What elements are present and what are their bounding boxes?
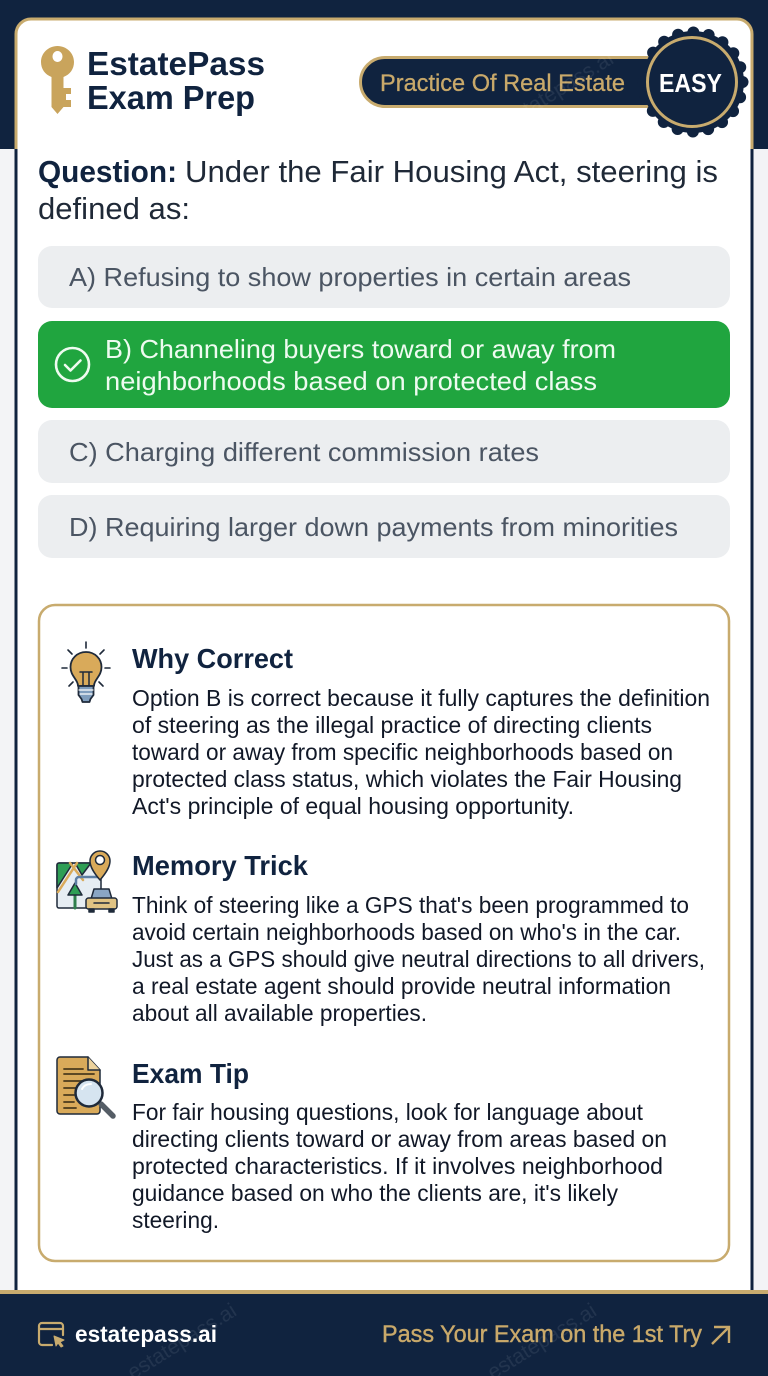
logo wordmark: Exam Prep xyxy=(87,79,255,116)
logo: key icon xyxy=(41,46,74,114)
option A xyxy=(38,246,730,308)
category pill xyxy=(360,58,670,106)
exam tip section xyxy=(132,1058,667,1233)
explanation panel xyxy=(39,605,729,1261)
exam tip section: For fair housing questions, look for language about xyxy=(132,1099,643,1125)
footer arrow xyxy=(712,1327,729,1344)
footer tagline: Pass Your Exam on the 1st Try xyxy=(382,1321,702,1348)
why correct section: Option B is correct because it fully captures the definition xyxy=(132,685,710,711)
icon: document with magnifier xyxy=(57,1057,113,1116)
logo wordmark xyxy=(87,45,265,116)
question xyxy=(38,154,718,226)
exam tip section: directing clients toward or away from areas based on xyxy=(132,1126,667,1152)
exam tip section: guidance based on who the clients are, it's likely xyxy=(132,1180,618,1206)
memory trick section: about all available properties. xyxy=(132,1000,427,1026)
icon: map with pin and car xyxy=(57,851,117,912)
memory trick section: Think of steering like a GPS that's been programmed to xyxy=(132,892,689,918)
why correct section: Why Correct xyxy=(132,643,293,674)
footer icon: browser cursor xyxy=(39,1323,64,1347)
header navy band xyxy=(0,0,768,149)
option B correct: B) Channeling buyers toward or away from xyxy=(105,334,616,364)
why correct section: protected class status, which violates the Fair Housing xyxy=(132,766,682,792)
exam tip section: protected characteristics. If it involves neighborhood xyxy=(132,1153,663,1179)
difficulty badge: EASY xyxy=(659,68,722,98)
memory trick section: Just as a GPS should give neutral directions to all drivers, xyxy=(132,946,705,972)
option C xyxy=(38,420,730,483)
option B correct: neighborhoods based on protected class xyxy=(105,366,597,396)
memory trick section: a real estate agent should provide neutral information xyxy=(132,973,671,999)
question: Under the Fair Housing Act, steering is xyxy=(185,154,718,189)
option B correct xyxy=(38,321,730,408)
memory trick section: Memory Trick xyxy=(132,850,308,881)
why correct section: of steering as the illegal practice of directing clients xyxy=(132,712,652,738)
footer bar xyxy=(0,1290,768,1376)
option D xyxy=(38,495,730,558)
watermark text xyxy=(123,47,618,1376)
memory trick section xyxy=(132,850,705,1026)
why correct section xyxy=(132,643,710,819)
question: defined as: xyxy=(38,191,190,226)
exam tip section: Exam Tip xyxy=(132,1058,249,1089)
watermark text: estatepass.ai xyxy=(500,47,618,132)
icon: check circle xyxy=(56,348,89,381)
exam tip section: steering. xyxy=(132,1207,219,1233)
memory trick section: avoid certain neighborhoods based on who's in the car. xyxy=(132,919,681,945)
why correct section: toward or away from specific neighborhoods based on xyxy=(132,739,673,765)
icon: light bulb xyxy=(62,642,110,702)
question: Question: xyxy=(38,154,177,189)
footer site url: estatepass.ai xyxy=(75,1321,217,1347)
logo wordmark: EstatePass xyxy=(87,45,265,82)
category pill: Practice Of Real Estate xyxy=(380,70,625,97)
difficulty badge xyxy=(642,31,744,133)
option C: C) Charging different commission rates xyxy=(69,437,539,467)
option A: A) Refusing to show properties in certain areas xyxy=(69,262,631,292)
option D: D) Requiring larger down payments from minorities xyxy=(69,512,678,542)
why correct section: Act's principle of equal housing opportunity. xyxy=(132,793,574,819)
